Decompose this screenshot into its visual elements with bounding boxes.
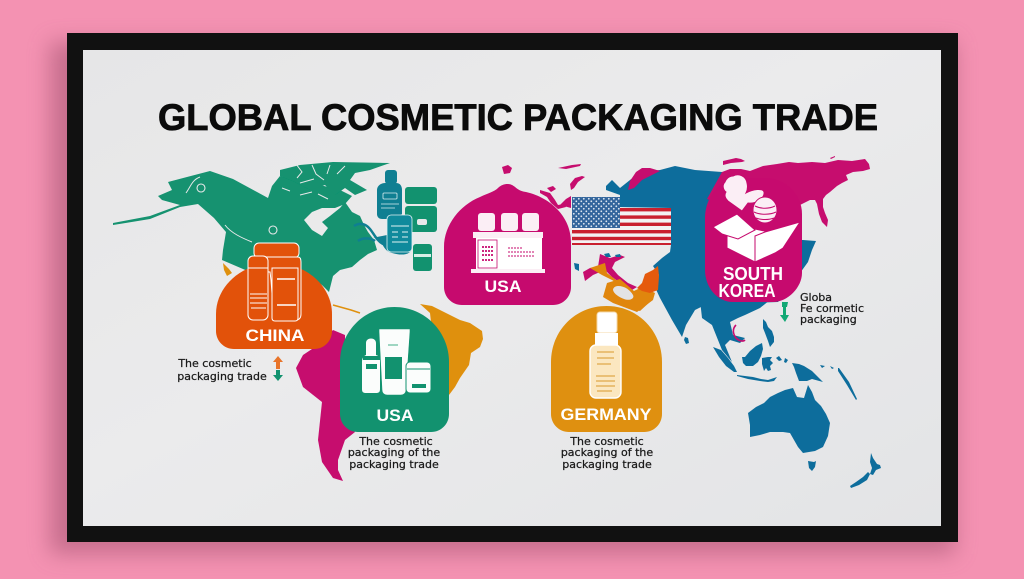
panel: USA green (340, 307, 449, 432)
map: Arctic fragments (723, 156, 835, 165)
panel: China (216, 243, 332, 349)
map: Asia blue (606, 166, 816, 337)
map: Europe islands (502, 164, 585, 209)
icon: open box with flower and jar (713, 175, 800, 262)
map: Mexico edge (223, 263, 232, 276)
small green tin (413, 244, 432, 271)
label: South Korea: KOREA (718, 281, 776, 301)
icon: orange bottles (248, 243, 301, 321)
icon: three white cosmetic containers (362, 329, 431, 395)
label: USA magenta: USA (484, 277, 522, 296)
map: Middle East and Africa (574, 253, 659, 312)
icon: teal cosmetic bottles over North America (354, 170, 437, 271)
map: South America west (296, 330, 355, 481)
map: Tasmania (808, 461, 816, 471)
teal serum bottle (377, 170, 402, 219)
teal cream jar (372, 215, 412, 255)
map: Indochina swirl (733, 325, 745, 341)
title: GLOBAL COSMETIC PACKAGING TRADE (158, 97, 878, 138)
caption: South Korea: Fe cormetic (800, 302, 864, 315)
map: South America north (420, 304, 483, 403)
caption: South Korea (800, 291, 864, 326)
label: South Korea (718, 264, 783, 301)
caption: USA green: packaging trade (349, 458, 439, 471)
label: USA green: USA (376, 406, 414, 425)
map: Central America (333, 305, 360, 313)
caption: USA green: packaging of the (348, 446, 440, 459)
world map (113, 156, 881, 488)
caption: USA green: The cosmetic (358, 435, 433, 448)
caption: Germany (561, 435, 653, 471)
map: Arctic Russia magenta strip (628, 168, 660, 190)
icon: China up and down arrows (273, 356, 283, 381)
panel: Germany (551, 306, 662, 432)
map: North America (113, 162, 390, 292)
map: New Zealand (850, 453, 881, 488)
panel: USA magenta (444, 184, 571, 305)
label: China: CHINA (246, 327, 305, 345)
map: Indonesia and Philippines (713, 319, 857, 400)
icon: South Korea down arrow (780, 302, 789, 322)
panel: South Korea (705, 175, 802, 302)
map: South East Asia mainland (700, 300, 770, 362)
label: Germany: GERMANY (560, 406, 652, 424)
map: Australia (748, 385, 830, 453)
flag of the USA (572, 197, 671, 245)
caption: China (177, 357, 267, 383)
caption: South Korea: Globa (800, 291, 832, 304)
map: Japan (785, 245, 812, 275)
icon: serum pump bottle (590, 312, 621, 398)
icon: white store shelf with jars (471, 213, 545, 273)
caption: South Korea: packaging (800, 313, 857, 326)
map: Sri Lanka (684, 337, 689, 344)
caption: Germany: packaging of the (561, 446, 653, 459)
picture frame (67, 33, 958, 542)
label: South Korea: SOUTH (723, 264, 783, 284)
teal loops (354, 224, 383, 244)
caption: Germany: The cosmetic (569, 435, 644, 448)
caption: China: The cosmetic (177, 357, 252, 370)
caption: Germany: packaging trade (562, 458, 652, 471)
map: Russia far east (707, 159, 870, 229)
caption: USA green (348, 435, 440, 471)
green jar (405, 187, 437, 232)
caption: China: packaging trade (177, 370, 267, 383)
